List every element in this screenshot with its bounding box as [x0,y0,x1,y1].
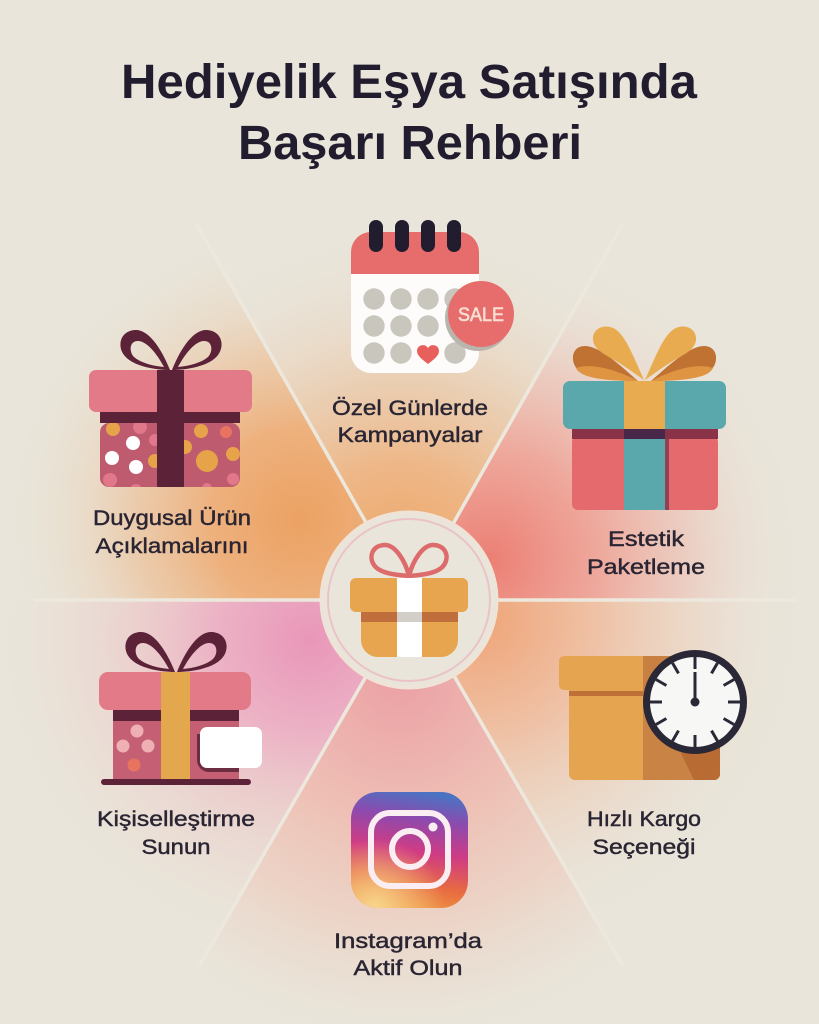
icon: instagram logo [351,792,468,908]
label: emotional descriptions: Duygusal Ürün [93,507,251,530]
label: aesthetic packaging [587,528,705,579]
icon: polka dot gift [89,330,252,496]
label: special days: Kampanyalar [338,424,483,447]
panel: special day campaigns [332,220,514,447]
icon: center gift [350,545,468,657]
label: fast shipping: Hızlı Kargo [587,808,701,831]
label: personalization [97,808,255,859]
icon: box with clock [559,650,747,780]
label: aesthetic packaging: Paketleme [587,556,705,579]
label: aesthetic packaging: Estetik [608,528,685,551]
icon: teal gift with gold bow [563,326,726,510]
label: special days: Özel Günlerde [332,397,488,420]
label: instagram [334,930,482,980]
label: fast shipping [587,808,701,859]
center emblem [321,512,497,688]
panel: fast shipping [559,650,747,859]
label: emotional descriptions: Açıklamalarını [96,535,248,558]
label: fast shipping: Seçeneği [592,836,696,859]
icon: gift with card [99,632,262,785]
title: Hediyelik Eşya Satışında [121,56,697,109]
label: personalization: Kişiselleştirme [97,808,255,831]
panel: instagram [334,792,482,980]
panel: aesthetic packaging [563,326,726,579]
title: Başarı Rehberi [238,117,582,170]
label: personalization: Sunun [142,836,210,859]
label: instagram: Instagram’da [334,930,482,953]
wedge divider lines [35,225,795,965]
label: special days [332,397,488,447]
icon: calendar with sale badge: SALE [458,305,504,326]
panel: personalization [97,632,262,859]
icon: calendar with sale badge [351,220,514,373]
panel: emotional descriptions [89,330,252,558]
label: instagram: Aktif Olun [354,957,462,980]
label: emotional descriptions [93,507,251,558]
title [121,56,697,170]
